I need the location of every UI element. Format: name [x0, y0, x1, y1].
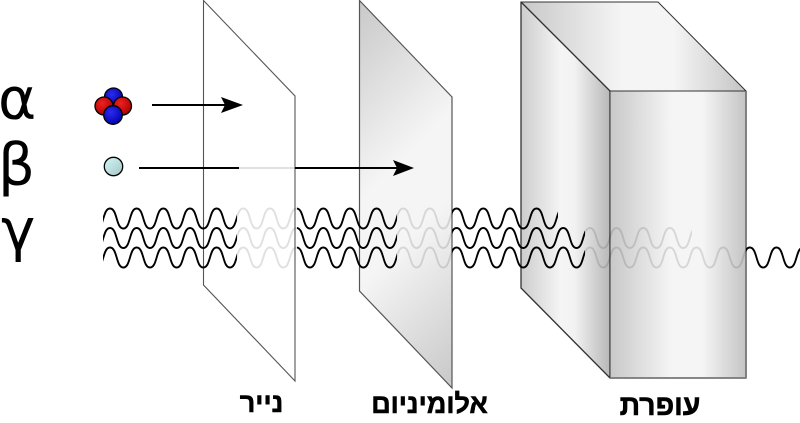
gamma symbol: γ	[1, 196, 35, 264]
icon: alpha particle	[95, 88, 132, 124]
panel: aluminium sheet	[360, 0, 452, 388]
icon: beta particle	[104, 157, 123, 176]
lead block right edge	[610, 91, 746, 378]
lead block front face	[610, 91, 746, 378]
gamma wave 2	[97, 228, 800, 248]
gamma wave 3	[97, 248, 800, 268]
label: lead: עופרת	[620, 390, 700, 422]
arrow: alpha stopped by paper	[152, 97, 243, 113]
lead block side face	[521, 2, 610, 378]
arrow: beta stopped by aluminium	[139, 160, 414, 176]
label: aluminium: אלומיניום	[371, 389, 488, 419]
gamma waves	[97, 208, 800, 268]
lead block top face	[521, 2, 746, 91]
panel: lead block	[521, 2, 746, 378]
label: paper: נייר	[240, 388, 283, 418]
panel: paper sheet	[204, 0, 295, 381]
gamma wave 1	[103, 208, 558, 230]
